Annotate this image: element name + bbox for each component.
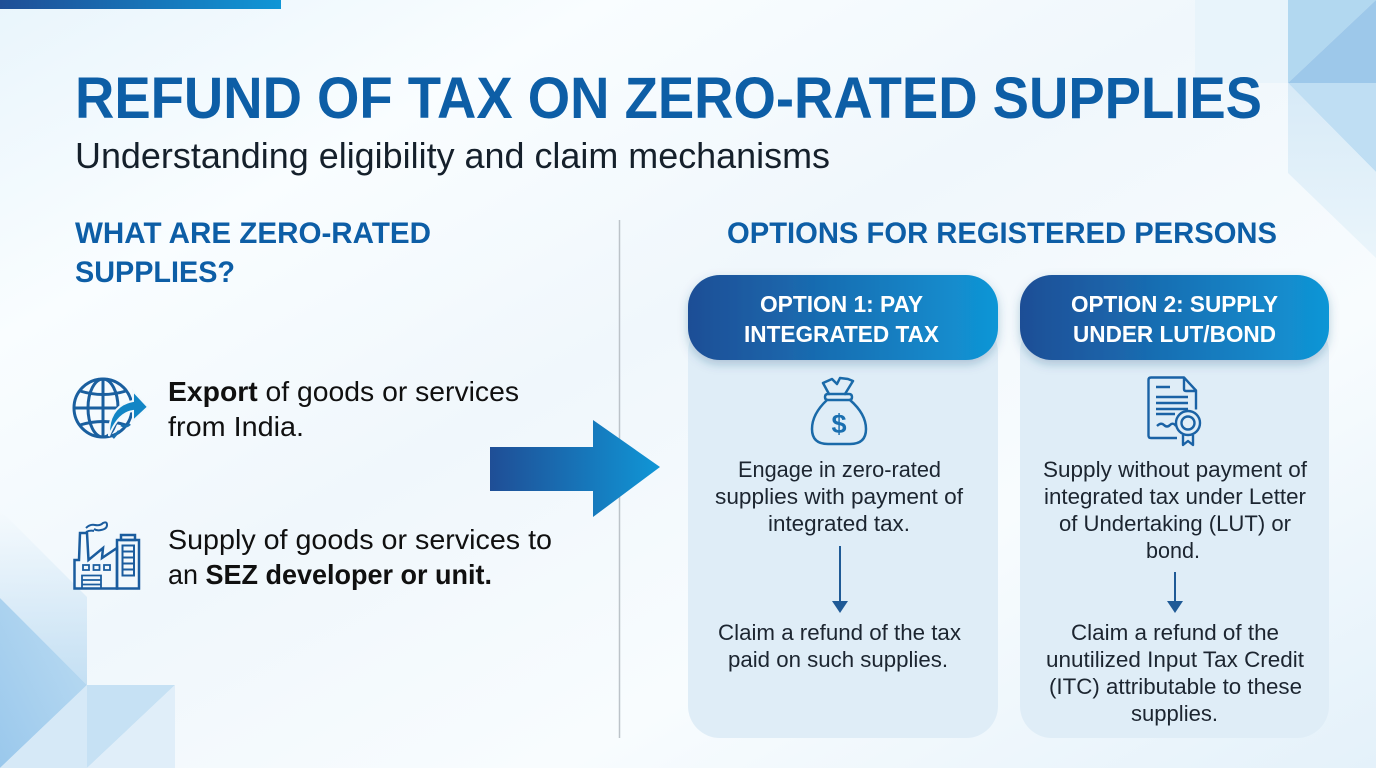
top accent bar: [0, 0, 281, 9]
arrow: down 1: [832, 546, 848, 613]
text: engage: supplies with payment of: [715, 484, 964, 509]
text: export: Export of goods or services: [168, 376, 519, 407]
text: export: [168, 376, 519, 442]
text: SEZ supply: Supply of goods or services to: [168, 524, 552, 555]
text: claim 1: [718, 620, 961, 672]
panel: option 2: [1020, 275, 1329, 738]
divider: [618, 220, 620, 738]
card body 2: [1020, 320, 1329, 738]
text: claim 1: paid on such supplies.: [728, 647, 948, 672]
icon: money bag: $: [831, 409, 847, 439]
text: engage: [715, 457, 964, 536]
text: claim 1: Claim a refund of the tax: [718, 620, 961, 645]
text: engage: Engage in zero-rated: [738, 457, 941, 482]
arrow: down 2: [1167, 572, 1183, 613]
text: claim 2: (ITC) attributable to these: [1049, 674, 1302, 699]
icon: certificate document: [1148, 378, 1200, 445]
panel: option 1: [688, 275, 998, 738]
subtitle: Understanding eligibility and claim mechanisms: [75, 135, 830, 176]
text: SEZ supply: [168, 524, 552, 590]
text: supply without: integrated tax under Letter: [1044, 484, 1306, 509]
text: supply without: Supply without payment of: [1043, 457, 1308, 482]
pill header 1: [688, 275, 998, 360]
pill header 2: [1020, 275, 1329, 360]
heading: what are zero-rated supplies: [75, 217, 431, 289]
text: SEZ supply: an SEZ developer or unit.: [168, 559, 492, 590]
heading: what are zero-rated supplies: SUPPLIES?: [75, 256, 235, 289]
text: claim 2: unutilized Input Tax Credit: [1046, 647, 1304, 672]
pill header 1: INTEGRATED TAX: [744, 321, 940, 347]
title: REFUND OF TAX ON ZERO-RATED SUPPLIES: [75, 66, 1262, 131]
heading: what are zero-rated supplies: WHAT ARE ZERO-RATED: [75, 217, 431, 250]
card body 1: [688, 320, 998, 738]
text: engage: integrated tax.: [768, 511, 910, 536]
pill header 1: OPTION 1: PAY: [760, 291, 923, 317]
text: claim 2: Claim a refund of the: [1071, 620, 1279, 645]
text: claim 2: [1046, 620, 1304, 726]
heading: options: OPTIONS FOR REGISTERED PERSONS: [727, 217, 1277, 250]
text: supply without: of Undertaking (LUT) or: [1059, 511, 1291, 536]
pill header 2: OPTION 2: SUPPLY: [1071, 291, 1278, 317]
text: claim 2: supplies.: [1131, 701, 1218, 726]
text: supply without: bond.: [1146, 538, 1200, 563]
big arrow: [490, 420, 660, 517]
text: export: from India.: [168, 411, 304, 442]
pill header 2: UNDER LUT/BOND: [1073, 321, 1276, 347]
icon: factory and building: [74, 522, 139, 588]
text: supply without: [1043, 457, 1308, 563]
icon: globe with export arrow: [74, 379, 148, 438]
icon: money bag: [812, 378, 866, 444]
